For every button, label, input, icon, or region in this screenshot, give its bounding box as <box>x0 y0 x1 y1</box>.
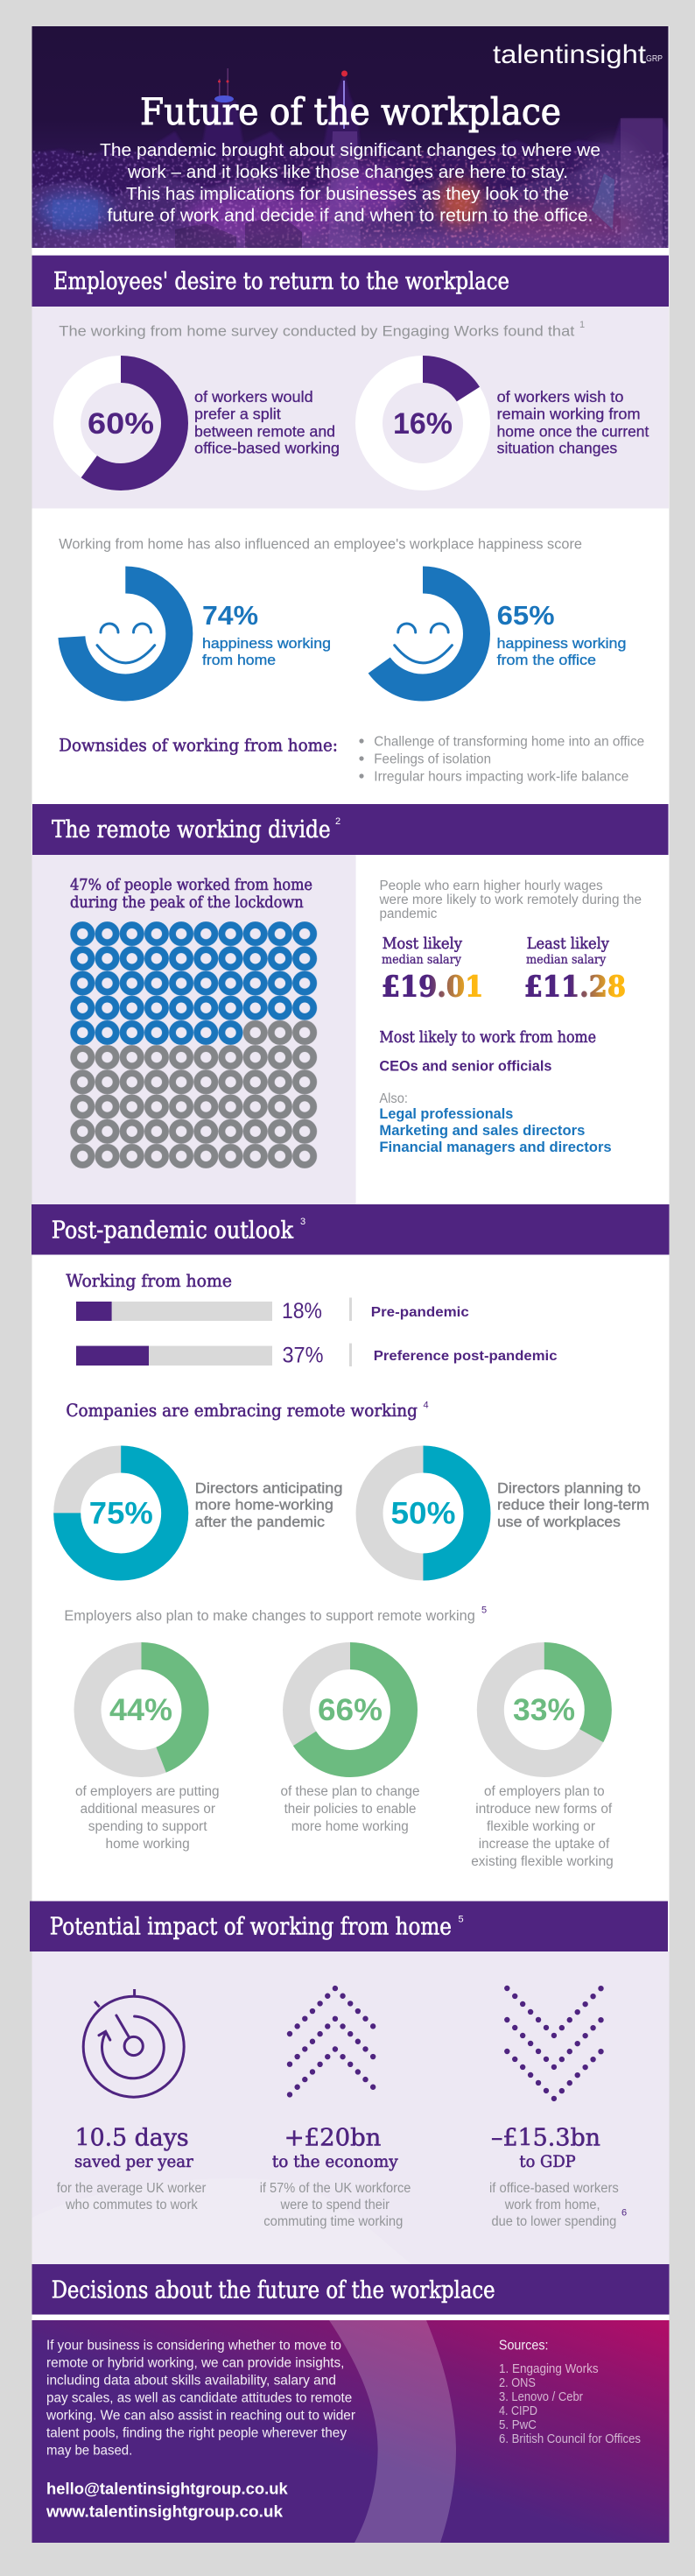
footer text: If your business is considering whether to move to <box>46 2339 341 2354</box>
heading: companies embracing remote working: 4 <box>424 1400 429 1410</box>
bar: 37% post-pandemic <box>76 1344 558 1368</box>
text: 33%: of employers plan to <box>484 1784 605 1799</box>
stat: 10.5 days: 10.5 days <box>75 2124 189 2151</box>
icon: dotted chevrons up <box>290 1988 381 2094</box>
label: split: between remote and <box>194 422 335 440</box>
donut: 60%: 60% <box>88 407 154 441</box>
sources: 4. CIPD <box>499 2404 537 2418</box>
stat: +£20bn: +£20bn <box>284 2124 381 2151</box>
donut: 33% <box>490 1655 598 1764</box>
salary: least likely: £11.28 <box>524 969 626 1003</box>
salary: least likely: Least likely <box>527 935 610 953</box>
stat: 65%: 65% <box>497 600 555 631</box>
text: 44%: spending to support <box>88 1819 207 1834</box>
sources: 1. Engaging Works <box>499 2362 599 2376</box>
donut: 66%: 66% <box>318 1693 383 1727</box>
section header: remote working divide <box>32 804 669 855</box>
bar: 37% post-pandemic: 37% <box>282 1344 324 1368</box>
icon: stopwatch <box>83 1989 184 2097</box>
label: remain: situation changes <box>497 439 618 456</box>
label: directors anticipating: more home-working <box>195 1496 333 1513</box>
stat: 74%: 74% <box>202 600 258 631</box>
happiness intro: Working from home has also influenced an employee's workplace happiness score <box>59 536 582 552</box>
survey intro: 1 <box>579 320 585 330</box>
stat: 65%: from the office <box>497 652 596 668</box>
label: directors planning: Directors planning to <box>497 1480 641 1496</box>
section header: remote working divide: The remote working divide <box>52 816 331 843</box>
hero intro text <box>100 140 600 226</box>
also list <box>379 1091 612 1155</box>
icon: dotted chevrons down <box>507 1988 601 2099</box>
employers intro: Employers also plan to make changes to support remote working <box>64 1608 475 1624</box>
text: 44%: home working <box>105 1837 190 1852</box>
wages text: People who earn higher hourly wages <box>380 879 603 893</box>
hero intro text: future of work and decide if and when to return to the office. <box>107 206 593 226</box>
stat: -£15.3bn: due to lower spending <box>492 2214 616 2229</box>
text: 44%: of employers are putting <box>75 1784 220 1799</box>
salary: most likely: £19.01 <box>382 969 483 1003</box>
section header: post-pandemic outlook: Post-pandemic outlook <box>52 1217 294 1245</box>
bar: 37% post-pandemic: Preference post-pandemic <box>374 1349 558 1364</box>
label: remain <box>497 388 649 456</box>
sources: 3. Lenovo / Cebr <box>499 2390 583 2404</box>
section header: post-pandemic outlook <box>32 1204 669 1254</box>
survey intro: The working from home survey conducted by Engaging Works found that <box>59 322 575 340</box>
footer text: working. We can also assist in reaching out to wider <box>46 2409 355 2424</box>
stat: +£20bn: to the economy <box>272 2152 398 2171</box>
text: 33% <box>471 1784 614 1869</box>
stat: 10.5 days <box>57 2124 206 2213</box>
text: 33%: increase the uptake of <box>479 1837 610 1852</box>
stat: 74%: from home <box>202 652 276 668</box>
heading: 47%: during the peak of the lockdown <box>70 894 304 912</box>
text: 66%: their policies to enable <box>284 1802 416 1817</box>
wages text: were more likely to work remotely during the <box>379 893 642 907</box>
text: 33%: introduce new forms of <box>475 1802 613 1817</box>
contact details: www.talentinsightgroup.co.uk <box>46 2502 284 2521</box>
ring grid: 47 of 100 <box>70 921 317 1168</box>
list: downsides: Irregular hours impacting work-life balance <box>374 769 628 784</box>
donut: 75% <box>67 1459 175 1567</box>
label: remain: of workers wish to <box>497 388 623 406</box>
contact details: hello@talentinsightgroup.co.uk <box>46 2480 288 2498</box>
also list: Also: <box>379 1091 408 1106</box>
section header: potential impact: Potential impact of working from home <box>50 1913 452 1940</box>
section header: employees' desire <box>32 256 669 307</box>
donut: 44% <box>88 1655 195 1764</box>
label: split <box>194 388 340 456</box>
donut: 66% <box>296 1655 404 1764</box>
hero banner <box>26 26 674 254</box>
section header: decisions <box>32 2264 669 2314</box>
heading: working from home: Working from home <box>66 1271 232 1291</box>
bar: 18% pre-pandemic: Pre-pandemic <box>371 1305 469 1320</box>
label: directors anticipating: after the pandemic <box>195 1514 326 1530</box>
stat: +£20bn <box>260 2124 411 2229</box>
stat: 10.5 days: who commutes to work <box>65 2198 198 2213</box>
section header: employees' desire: Employees' desire to return to the workplace <box>53 268 509 295</box>
donut: 75%: 75% <box>89 1497 153 1531</box>
section header: remote working divide: 2 <box>335 816 340 827</box>
wages text <box>379 879 642 921</box>
text: 66%: more home working <box>291 1819 409 1834</box>
list: downsides: Challenge of transforming home into an office <box>374 734 644 750</box>
sources: 5. PwC <box>499 2418 537 2432</box>
sources: 6. British Council for Offices <box>499 2432 641 2446</box>
label: split: office-based working <box>194 439 340 456</box>
footer text: remote or hybrid working, we can provide insights, <box>46 2356 344 2371</box>
hero intro text: work – and it looks like those changes are here to stay. <box>127 162 568 182</box>
footer text: pay scales, as well as candidate attitudes to remote <box>46 2391 352 2406</box>
stat: 74% <box>202 600 331 668</box>
label: remain: remain working from <box>497 405 641 422</box>
stat: -£15.3bn: to GDP <box>519 2152 576 2171</box>
stat: +£20bn: commuting time working <box>263 2214 403 2229</box>
salary: most likely <box>382 935 483 1003</box>
label: directors anticipating <box>195 1480 342 1530</box>
wages text: pandemic <box>380 907 438 921</box>
label: split: prefer a split <box>194 405 281 422</box>
bar: 18% pre-pandemic <box>76 1298 469 1323</box>
salary: most likely: median salary <box>382 953 461 967</box>
stat: 10.5 days: for the average UK worker <box>57 2181 206 2196</box>
donut: 16% <box>369 370 476 476</box>
donut: 33%: 33% <box>513 1693 575 1727</box>
salary: least likely <box>524 935 626 1003</box>
donut: 50%: 50% <box>390 1497 455 1531</box>
CEOs: CEOs and senior officials <box>379 1057 551 1074</box>
also list: Financial managers and directors <box>379 1139 612 1155</box>
also list: Legal professionals <box>379 1105 513 1122</box>
sources: 2. ONS <box>499 2376 536 2390</box>
heading: companies embracing remote working: Companies are embracing remote working <box>66 1401 418 1421</box>
employers intro: 5 <box>481 1606 487 1616</box>
stat: +£20bn: if 57% of the UK workforce <box>260 2181 411 2196</box>
label: split: of workers would <box>194 388 313 406</box>
label: remain: home once the current <box>497 422 649 440</box>
sources <box>499 2339 641 2446</box>
stat: 10.5 days: saved per year <box>74 2152 194 2171</box>
stat: -£15.3bn: 6 <box>621 2207 627 2218</box>
text: 44%: additional measures or <box>81 1802 215 1817</box>
section header: post-pandemic outlook: 3 <box>300 1217 305 1227</box>
heading: downsides: Downsides of working from home: <box>59 735 338 756</box>
salary: least likely: median salary <box>526 953 607 967</box>
bar: 18% pre-pandemic: 18% <box>282 1299 322 1323</box>
salary: most likely: Most likely <box>383 935 463 953</box>
panel: engaging works survey <box>32 307 669 508</box>
stat: -£15.3bn: –£15.3bn <box>491 2124 600 2151</box>
text: 66%: of these plan to change <box>280 1784 420 1799</box>
text: 44% <box>75 1784 220 1852</box>
donut: 44%: 44% <box>109 1693 172 1727</box>
sources: Sources: <box>499 2339 548 2354</box>
text: 66% <box>280 1784 420 1834</box>
stat: 65% <box>497 600 626 668</box>
section header: potential impact: 5 <box>459 1915 464 1925</box>
stat: -£15.3bn: if office-based workers <box>489 2181 619 2196</box>
footer text: talent pools, finding the right people wherever they <box>46 2426 347 2441</box>
stat: +£20bn: were to spend their <box>280 2198 390 2213</box>
panel: 47% lockdown <box>32 855 356 1204</box>
donut: 16%: 16% <box>393 407 453 441</box>
text: 33%: flexible working or <box>487 1819 595 1834</box>
label: directors planning: use of workplaces <box>497 1514 621 1530</box>
list: downsides <box>359 734 644 784</box>
also list: Marketing and sales directors <box>379 1122 585 1139</box>
footer text: including data about skills availability, salary and <box>46 2374 336 2389</box>
logo: talentinsight GRP: talentinsight <box>493 40 647 69</box>
heading: most likely to work from home: Most likely to work from home <box>380 1029 596 1047</box>
section header: decisions: Decisions about the future of the workplace <box>52 2276 495 2304</box>
label: directors planning <box>497 1480 649 1530</box>
heading: 47% <box>70 877 312 912</box>
logo: talentinsight GRP: GRP <box>646 53 663 64</box>
icon: smile donut 65% <box>369 580 476 688</box>
stat: -£15.3bn <box>489 2124 627 2229</box>
hero intro text: The pandemic brought about significant changes to where we <box>100 140 600 160</box>
hero intro text: This has implications for businesses as they look to the <box>126 184 569 204</box>
label: directors anticipating: Directors anticipating <box>195 1480 342 1496</box>
list: downsides: Feelings of isolation <box>374 752 491 766</box>
stat: 65%: happiness working <box>497 635 626 652</box>
panel: footer <box>32 2320 669 2543</box>
title: Future of the workplace <box>140 90 561 133</box>
footer text <box>46 2339 355 2459</box>
label: directors planning: reduce their long-term <box>497 1496 649 1513</box>
donut: 50% <box>369 1459 477 1567</box>
text: 33%: existing flexible working <box>471 1854 614 1869</box>
contact details <box>46 2480 288 2521</box>
section header: potential impact <box>30 1901 668 1951</box>
donut: 60% <box>67 370 175 476</box>
stat: -£15.3bn: work from home, <box>504 2198 600 2213</box>
icon: smile donut 74% <box>72 580 179 688</box>
heading: 47%: 47% of people worked from home <box>70 877 312 894</box>
panel: potential impact <box>32 1951 669 2264</box>
stat: 74%: happiness working <box>202 635 331 652</box>
footer text: may be based. <box>46 2444 132 2459</box>
